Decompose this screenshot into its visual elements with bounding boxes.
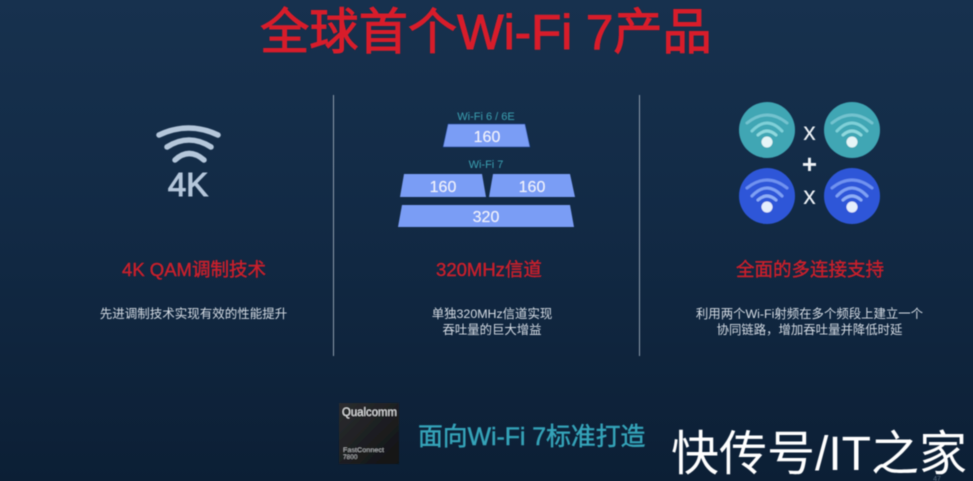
heading: 320MHz: 320MHz信道 bbox=[436, 259, 542, 280]
label: Wi-Fi 7: Wi-Fi 7 bbox=[469, 159, 503, 171]
icon: 4K wifi: 4K bbox=[168, 166, 208, 203]
icon: teal wifi left bbox=[739, 102, 795, 158]
block: 320 bbox=[398, 205, 574, 227]
text block: 4K QAM description: 先进调制技术实现有效的性能提升 bbox=[100, 306, 287, 321]
icon: 4K wifi bbox=[159, 128, 218, 203]
divider right bbox=[639, 95, 640, 356]
panel: multi-link bbox=[696, 102, 923, 337]
block: 320: 320 bbox=[473, 209, 499, 226]
block: 160 right: 160 bbox=[519, 179, 545, 196]
icon: teal wifi right bbox=[824, 102, 880, 158]
block: 160 right bbox=[489, 174, 575, 197]
panel: 4K QAM bbox=[100, 128, 287, 321]
text block: 320MHz description: 吞吐量的巨大增益 bbox=[442, 322, 542, 337]
chip: Qualcomm FastConnect 7800: FastConnect bbox=[343, 447, 384, 454]
chip: Qualcomm FastConnect 7800 bbox=[339, 403, 399, 464]
text block: 320MHz description bbox=[432, 306, 552, 337]
block: 160 left: 160 bbox=[430, 179, 456, 196]
symbols: x + x: x bbox=[803, 118, 816, 146]
chip: Qualcomm FastConnect 7800: Qualcomm bbox=[342, 407, 397, 419]
heading: multi-link: 全面的多连接支持 bbox=[736, 259, 884, 280]
heading: 4K QAM: 4K QAM调制技术 bbox=[122, 259, 266, 280]
block: 160 left bbox=[400, 174, 486, 197]
chip: Qualcomm FastConnect 7800: 7800 bbox=[343, 454, 358, 461]
icon: blue wifi left bbox=[739, 168, 795, 224]
symbols: x + x bbox=[802, 118, 817, 210]
label: Wi-Fi 6/6E: Wi-Fi 6 / 6E bbox=[457, 111, 515, 123]
chart: channel width diagram bbox=[398, 111, 575, 227]
title: 全球首个Wi-Fi 7产品 bbox=[260, 5, 712, 60]
icon: blue wifi right bbox=[824, 168, 880, 224]
block: 160 Wi-Fi 6: 160 bbox=[474, 129, 500, 146]
watermark: 快传号/IT之家 bbox=[671, 428, 967, 481]
divider left bbox=[333, 95, 334, 356]
symbols: x + x: + bbox=[802, 149, 817, 179]
symbols: x + x: x bbox=[803, 182, 816, 210]
block: 160 Wi-Fi 6 bbox=[443, 124, 530, 147]
text block: multi-link description: 利用两个Wi-Fi射频在多个频段上建立一个 bbox=[696, 306, 923, 321]
tagline: 面向Wi-Fi 7标准打造 bbox=[418, 423, 645, 451]
text block: 320MHz description: 单独320MHz信道实现 bbox=[432, 306, 552, 321]
text block: multi-link description bbox=[696, 306, 923, 337]
icon group: four wifi circles bbox=[739, 102, 880, 224]
panel: 320MHz bbox=[398, 111, 575, 337]
text block: multi-link description: 协同链路，增加吞吐量并降低时延 bbox=[717, 322, 902, 337]
